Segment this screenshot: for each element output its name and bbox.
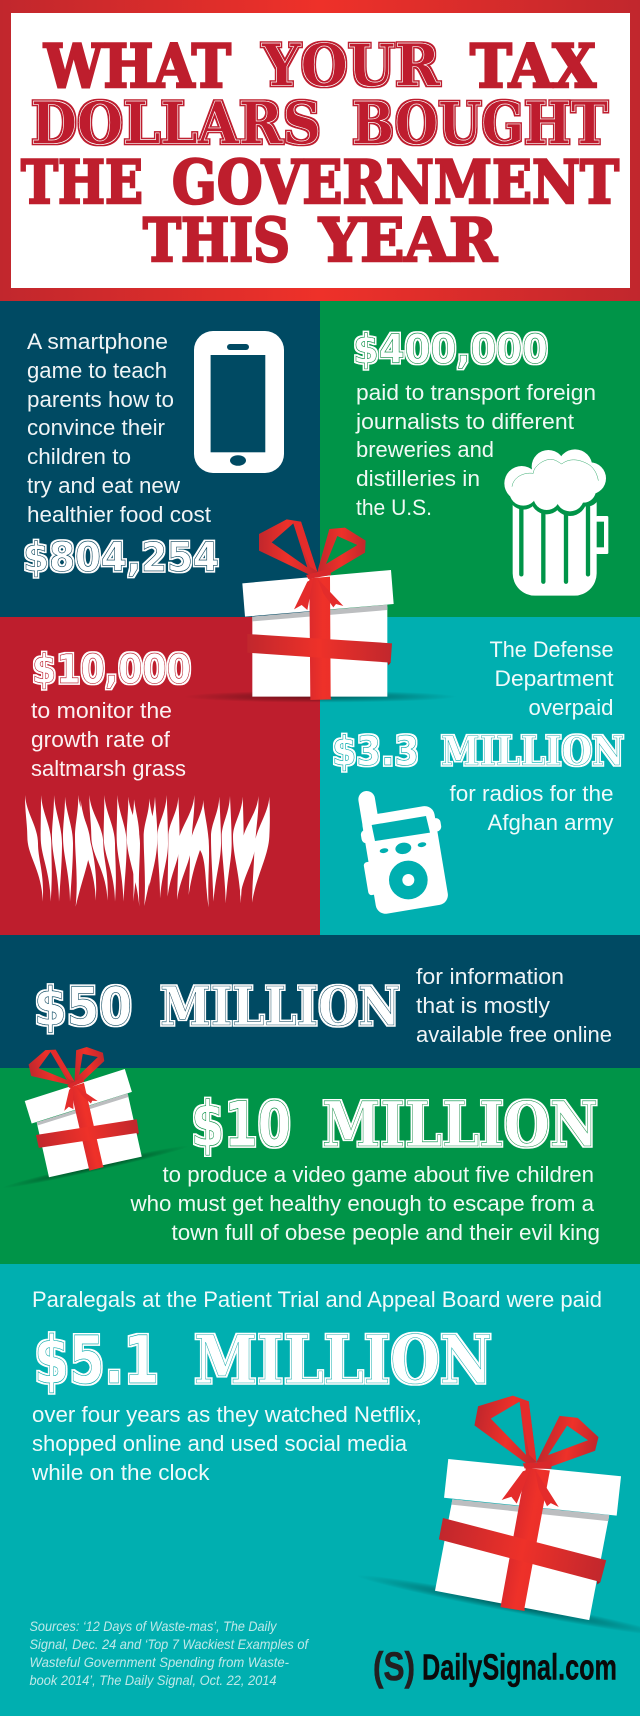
icon: gift on center of quadrant xyxy=(183,519,457,703)
panel: smartphone game xyxy=(0,301,320,617)
amount: $50 million xyxy=(34,976,400,1038)
title: THIS xyxy=(143,206,290,276)
sources: Sources: ‘12 Days of Waste-mas’, The Daily xyxy=(30,1618,277,1634)
text: smartphone description: healthier food cost xyxy=(27,502,211,527)
text: brewery description: the U.S. xyxy=(356,495,432,520)
text: brewery description: breweries and xyxy=(356,437,494,462)
text: smartphone description xyxy=(27,329,211,527)
text: defense intro xyxy=(490,637,614,720)
text: video game description: who must get healthy enough to escape from a xyxy=(129,1191,595,1216)
text: radios description: for radios for the xyxy=(450,781,614,806)
panel: video game xyxy=(0,1068,640,1264)
text: saltmarsh description: saltmarsh grass xyxy=(31,756,186,781)
amount: $10 million: MILLION xyxy=(322,1088,598,1161)
amount: $5.1 million xyxy=(34,1321,492,1399)
amount: $50 million: $50 xyxy=(34,977,132,1038)
title: YEAR xyxy=(318,206,498,276)
text: radios description xyxy=(450,781,614,835)
amount: $3.3 million xyxy=(332,728,624,775)
text: smartphone description: A smartphone xyxy=(27,329,168,354)
title: THE xyxy=(21,148,143,218)
header panel xyxy=(0,0,640,301)
text: radios description: Afghan army xyxy=(488,810,614,835)
title: DOLLARS xyxy=(31,90,321,158)
sources xyxy=(30,1618,310,1688)
amount: $10 million xyxy=(191,1088,598,1161)
text: brewery description: journalists to different xyxy=(355,409,574,434)
text: video game description: town full of obese people and their evil king xyxy=(172,1220,600,1245)
text: smartphone description: parents how to xyxy=(27,387,174,412)
icon: smartphone xyxy=(194,331,284,473)
icon: grass xyxy=(25,795,270,907)
panel: brewery journalists xyxy=(320,301,640,617)
icon: gift at green panel xyxy=(0,1024,190,1192)
text: brewery description xyxy=(355,380,596,520)
text: saltmarsh description xyxy=(31,698,186,781)
amount: $50 million: MILLION xyxy=(160,976,400,1038)
amount: $400,000: $400,000 xyxy=(353,327,548,373)
title: TAX xyxy=(470,32,596,102)
panel: defense radios xyxy=(320,617,640,935)
logo: DailySignal.com xyxy=(373,1645,617,1689)
text: brewery description: distilleries in xyxy=(356,466,480,491)
amount: $10,000: $10,000 xyxy=(32,647,191,693)
text: video game description xyxy=(129,1162,600,1245)
logo: DailySignal.com: (S) xyxy=(373,1645,415,1689)
text: smartphone description: convince their xyxy=(27,415,165,440)
title: YOUR xyxy=(261,32,441,100)
text: paralegals intro: Paralegals at the Patient Trial and Appeal Board were paid xyxy=(32,1287,602,1312)
title xyxy=(21,32,619,276)
text: free online description: that is mostly xyxy=(416,993,550,1018)
text: smartphone description: children to xyxy=(27,444,131,469)
text: saltmarsh description: growth rate of xyxy=(31,727,171,752)
amount: $3.3 million: $3.3 xyxy=(332,729,419,775)
amount: $10 million: $10 xyxy=(191,1088,291,1161)
sources: Signal, Dec. 24 and ‘Top 7 Wackiest Examples of xyxy=(30,1636,310,1652)
amount: $804,254: $804,254 xyxy=(23,535,219,581)
text: smartphone description: try and eat new xyxy=(27,473,180,498)
icon: radio xyxy=(360,799,449,915)
text: defense intro: The Defense xyxy=(490,637,614,662)
text: video game description: to produce a video game about five children xyxy=(162,1162,594,1187)
text: free online description: for information xyxy=(416,964,564,989)
text: defense intro: Department xyxy=(494,666,614,691)
sources: Wasteful Government Spending from Waste- xyxy=(30,1654,289,1670)
text: free online description: available free online xyxy=(416,1022,612,1047)
text: saltmarsh description: to monitor the xyxy=(31,698,172,723)
icon: beer mug xyxy=(504,449,608,596)
text: paralegals description xyxy=(31,1402,422,1485)
panel: free online information xyxy=(0,935,640,1068)
panel: paralegals xyxy=(0,1264,640,1716)
text: smartphone description: game to teach xyxy=(27,358,167,383)
icon: gift large xyxy=(355,1373,640,1642)
text: paralegals description: while on the clock xyxy=(31,1460,211,1485)
text: defense intro: overpaid xyxy=(528,695,614,720)
amount: $5.1 million: MILLION xyxy=(194,1321,492,1399)
title: WHAT xyxy=(43,32,231,102)
text: free online description xyxy=(416,964,612,1047)
text: paralegals description: shopped online and used social media xyxy=(32,1431,408,1456)
text: brewery description: paid to transport foreign xyxy=(356,380,596,405)
panel: saltmarsh grass xyxy=(0,617,320,935)
text: paralegals description: over four years as they watched Netflix, xyxy=(32,1402,422,1427)
amount: $5.1 million: $5.1 xyxy=(34,1322,159,1399)
sources: book 2014’, The Daily Signal, Oct. 22, 2014 xyxy=(30,1672,277,1688)
